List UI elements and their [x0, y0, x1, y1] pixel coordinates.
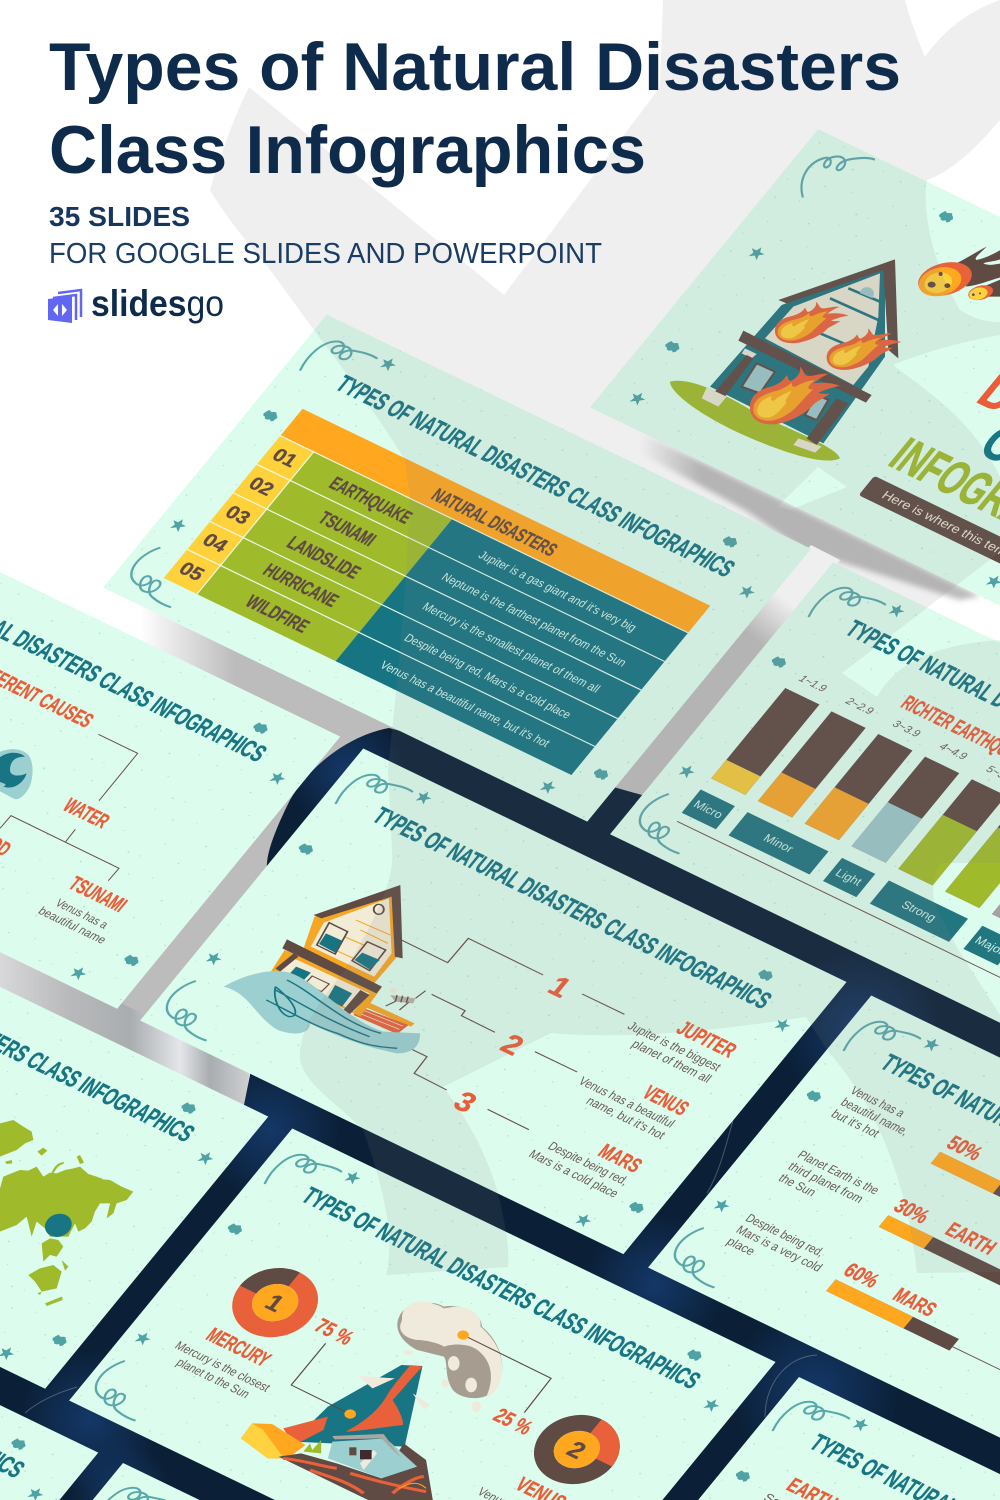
item: Jupiter — [615, 999, 742, 1086]
scale category labels: Strong — [899, 898, 939, 924]
slide: volcano donut charts — [69, 1128, 776, 1500]
item: Venus — [465, 1461, 595, 1500]
connector lines — [374, 927, 624, 1130]
disaster names: HURRICANE — [258, 560, 343, 611]
descriptions: Mercury is the smallest planet of them all — [419, 600, 603, 695]
item: Venus text: Venus has a — [847, 1083, 909, 1120]
disaster names: EARTHQUAKE — [325, 474, 416, 528]
slide: flood timeline — [140, 748, 847, 1254]
icon: tsunami wave — [0, 749, 33, 799]
disaster names: LANDSLIDE — [282, 533, 365, 583]
shadow band under cause tree slide — [0, 945, 250, 1108]
item: Mercury: planet to the Sun — [173, 1355, 253, 1401]
shadow band under cover slide — [635, 430, 980, 600]
bar: Mars 60% — [826, 1258, 977, 1351]
slide: bottom partial — [0, 1463, 606, 1500]
item: Earth text: third planet from — [785, 1159, 867, 1206]
bar: Earth 30%: 30% — [889, 1194, 935, 1228]
tsunami description: Venus has a — [53, 897, 111, 931]
label: tsunami: TSUNAMI — [64, 872, 132, 916]
item: Venus: VENUS — [638, 1081, 694, 1120]
item: Earth text — [776, 1148, 883, 1220]
tree connectors — [0, 734, 138, 881]
item: Venus — [566, 1055, 694, 1142]
disaster names: TSUNAMI — [314, 508, 380, 551]
bar: Venus 50%: 50% — [942, 1131, 988, 1165]
slide count: 35 SLIDES — [49, 201, 190, 232]
scale category labels — [682, 790, 1000, 965]
logo: slidesgo: slidesgo — [91, 283, 224, 324]
item: Mars text: place — [724, 1234, 758, 1258]
item: Jupiter: Jupiter is the biggest — [625, 1019, 725, 1074]
item: Mars: MARS — [594, 1139, 647, 1177]
row numbers: 02 — [244, 474, 278, 500]
item: Mars — [526, 1116, 647, 1200]
donut: Venus 25%: 2 — [561, 1436, 591, 1464]
row numbers: 04 — [198, 530, 232, 557]
row numbers: 03 — [221, 502, 255, 529]
donut: Venus 25% — [531, 1413, 623, 1486]
scale category labels: Minor — [761, 831, 796, 855]
item: Mercury: MERCURY — [201, 1323, 276, 1371]
item: Mars text: Mars is a very cold — [733, 1223, 826, 1274]
bar: Mars 60%: 60% — [839, 1258, 884, 1292]
bar: Mars 60%: MARS — [888, 1283, 942, 1321]
value: 75%: 75 % — [310, 1314, 359, 1349]
slide: causes tree — [0, 503, 340, 1009]
step numbers: 2 — [494, 1029, 530, 1062]
descriptions: Jupiter is a gas giant and it's very big — [476, 548, 639, 634]
bar chart — [711, 671, 1000, 931]
navy backdrop — [0, 700, 1000, 1500]
slide: wildfire cover — [590, 129, 1000, 642]
main title: Class Infographics — [49, 112, 646, 188]
item: Mars text — [724, 1211, 835, 1286]
descriptions: Despite being red, Mars is a cold place — [401, 631, 574, 721]
main title — [49, 29, 901, 188]
shadow band between table and chart slides — [610, 545, 840, 800]
table header: NATURAL DISASTERS — [427, 485, 561, 561]
item: Venus: Venus has a beautiful — [576, 1074, 678, 1130]
item: Earth text: Planet Earth is the — [795, 1148, 883, 1197]
item: Mars: Mars is a cold place — [526, 1147, 622, 1200]
item: Mercury — [163, 1315, 293, 1406]
slide: Richter scale bar chart — [610, 562, 1000, 1069]
disaster names: WILDFIRE — [241, 592, 313, 637]
icon: burning house — [670, 259, 901, 461]
item: Earth text: the Sun — [776, 1171, 819, 1199]
icon: striped cat — [386, 988, 426, 1010]
descriptions: Neptune is the farthest planet from the Sun — [439, 571, 629, 669]
scale category labels: Light — [833, 866, 865, 889]
row numbers: 01 — [268, 445, 301, 472]
slide: table of natural disasters — [103, 315, 811, 822]
icon: meteors — [915, 247, 1000, 303]
main title: Types of Natural Disasters — [49, 29, 901, 105]
item: Venus text — [828, 1083, 922, 1150]
value: 25%: 25 % — [489, 1404, 538, 1439]
descriptions — [370, 542, 653, 754]
slide: world map — [0, 883, 268, 1389]
subtitle: FOR GOOGLE SLIDES AND POWERPOINT — [49, 238, 602, 270]
step numbers: 1 — [541, 971, 577, 1004]
slide: bottom right partial — [576, 1377, 1000, 1500]
donut: Mercury 75%: 1 — [259, 1290, 290, 1317]
bar chart: 1~1.9 — [796, 673, 829, 695]
shadow band under table slide — [140, 605, 420, 795]
table — [164, 409, 710, 775]
bar chart: 4~4.9 — [937, 741, 969, 762]
tsunami description: beautiful name — [35, 904, 109, 947]
scale category labels: Micro — [691, 798, 726, 821]
row numbers — [174, 445, 301, 585]
item: Jupiter: JUPITER — [672, 1016, 742, 1062]
world map — [0, 1120, 133, 1306]
disaster names — [231, 474, 416, 642]
bar: Earth 30% — [878, 1193, 1000, 1286]
row numbers: 05 — [174, 559, 208, 585]
tornado silhouette overlay — [210, 0, 1000, 1275]
bar: Venus 50% — [931, 1131, 1000, 1223]
item: Mars text: Despite being red, — [743, 1211, 828, 1259]
item: Venus: name, but it's hot — [583, 1094, 669, 1142]
slide: percent bars — [648, 995, 1000, 1500]
bar chart: 3~3.9 — [890, 718, 922, 740]
donut: Mercury 75% — [229, 1266, 321, 1339]
item: Venus text: but it's hot — [828, 1107, 883, 1140]
icon: erupting volcano — [241, 1301, 502, 1500]
step numbers: 3 — [447, 1086, 483, 1119]
label: water: WATER — [58, 794, 115, 833]
slide title: TYPES OF NATURAL DISASTERS CLASS INFOGRAPHICS — [330, 370, 741, 582]
step numbers — [447, 971, 577, 1119]
bar chart: 2~2.9 — [842, 695, 876, 717]
item: Jupiter: planet of them all — [629, 1037, 715, 1085]
icon: flooded house — [224, 885, 426, 1053]
item: Venus text: beautiful name, — [838, 1095, 912, 1138]
cover subtitle pill — [859, 476, 1000, 604]
item: Mercury: Mercury is the closest — [172, 1338, 274, 1394]
callout connectors — [291, 1330, 551, 1419]
slide: bottom left partial — [0, 1219, 98, 1500]
curl — [802, 156, 874, 197]
item: Mars: Despite being red, — [545, 1139, 632, 1188]
descriptions: Venus has a beautiful name, but it's hot — [377, 659, 553, 750]
shadow band between cause tree and flood slides — [100, 735, 345, 1030]
